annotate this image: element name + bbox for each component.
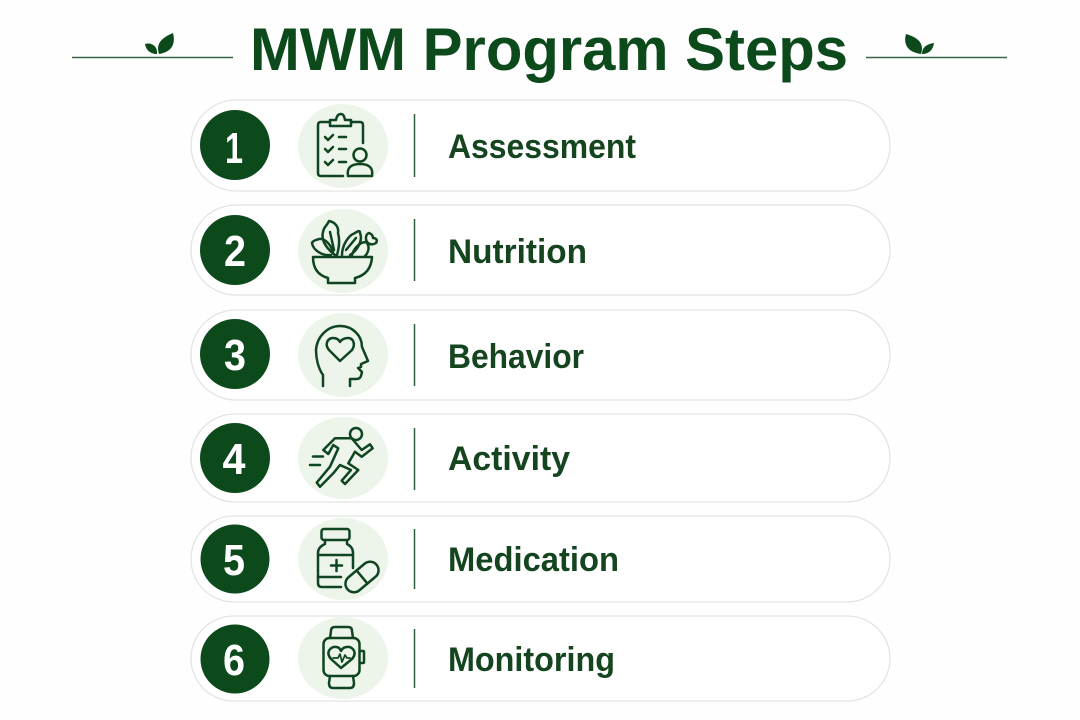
label: Behavior — [448, 338, 584, 376]
number badge 4 — [200, 423, 270, 493]
icon: smartwatch with heart — [298, 617, 388, 699]
step 5: Medication — [191, 516, 890, 602]
step 3: Behavior — [191, 310, 890, 400]
number badge 2: 2 — [224, 227, 246, 276]
label: Nutrition — [448, 233, 587, 271]
number badge 3: 3 — [224, 331, 246, 380]
icon: head with heart — [298, 313, 388, 397]
icon: medicine bottle and pill — [298, 518, 388, 600]
number badge 1 — [200, 110, 270, 180]
number badge 6 — [200, 624, 270, 694]
icon: salad bowl — [298, 209, 388, 293]
number badge 1: 1 — [225, 124, 243, 173]
label: Monitoring — [448, 641, 615, 679]
right title ornament: line and leaves — [866, 34, 1007, 58]
icon: running person — [298, 417, 388, 499]
number badge 5 — [200, 524, 270, 594]
step 4: Activity — [191, 414, 890, 502]
step 2: Nutrition — [191, 205, 890, 295]
number badge 4: 4 — [222, 435, 246, 484]
title: MWM Program Steps — [250, 16, 848, 83]
number badge 6: 6 — [223, 636, 245, 685]
number badge 5: 5 — [223, 536, 245, 585]
label: Medication — [448, 541, 619, 579]
step 1: Assessment — [191, 100, 890, 191]
label: Assessment — [448, 128, 636, 166]
label: Activity — [448, 440, 570, 478]
number badge 3 — [200, 319, 270, 389]
left title ornament: line and leaves — [72, 33, 233, 58]
step 6: Monitoring — [191, 616, 890, 701]
icon: clipboard with person — [298, 104, 388, 188]
number badge 2 — [200, 215, 270, 285]
